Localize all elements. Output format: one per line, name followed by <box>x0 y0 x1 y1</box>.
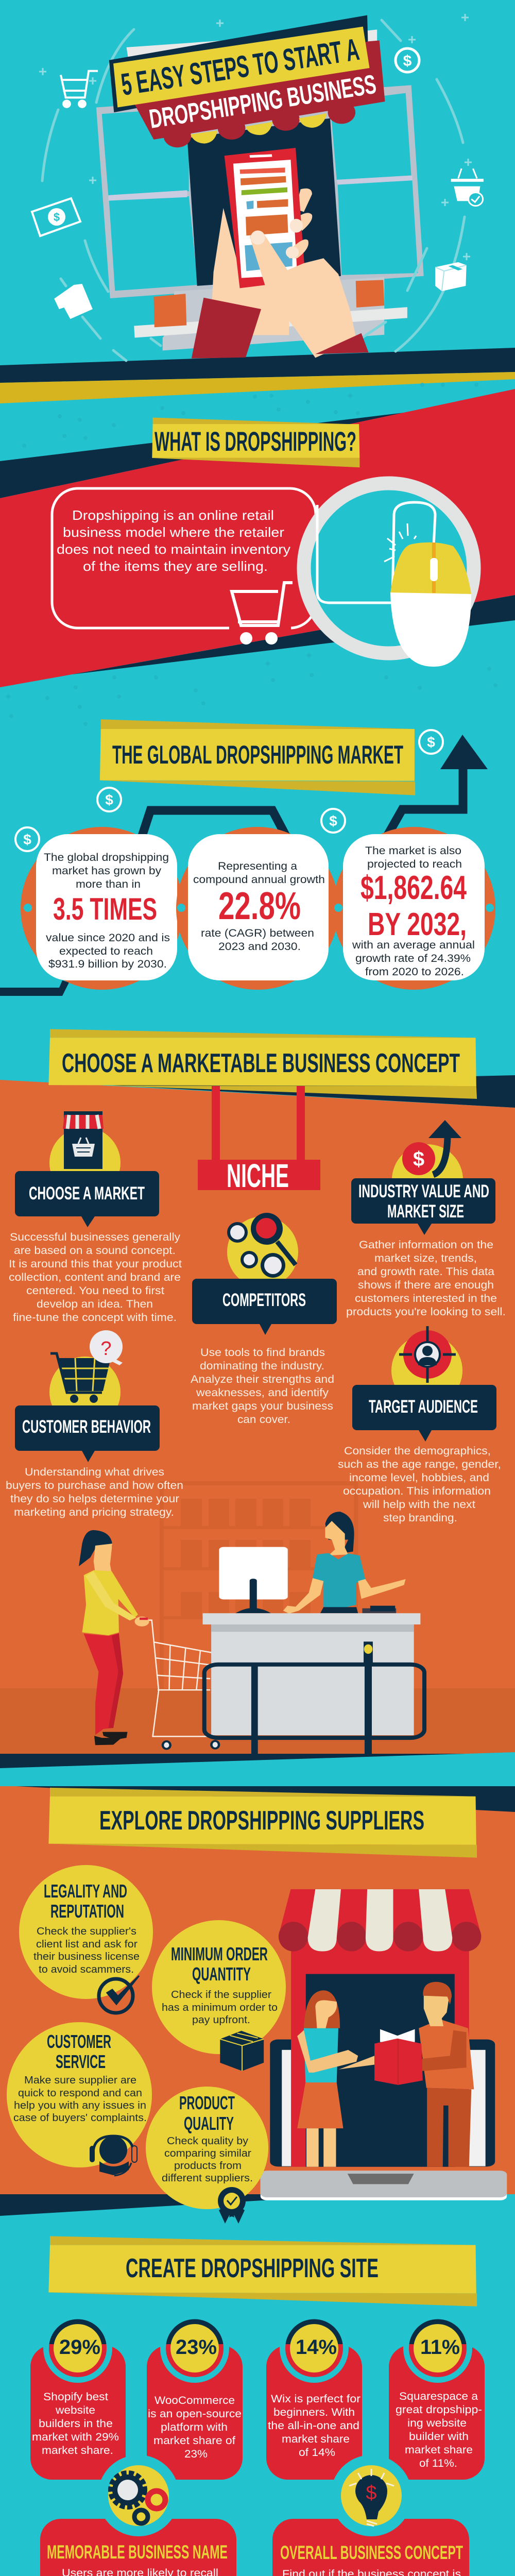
stat card: WooCommerce 23 percent: market share of <box>153 2435 235 2447</box>
section heading: explore suppliers <box>48 1788 477 1858</box>
icon: competitors magnifier and people <box>227 1213 298 1287</box>
text: customer behavior description: buyers to purchase and how often <box>6 1480 183 1492</box>
stat card: WooCommerce 23 percent: platform with <box>161 2421 228 2433</box>
panel: minimum order quantity: has a minimum order to <box>162 2002 278 2013</box>
panel: laptop base <box>261 2171 507 2200</box>
stat card: Squarespace 11 percent: builder with <box>409 2431 469 2443</box>
panel: customer service: quick to respond and can <box>18 2088 142 2099</box>
text: industry value description <box>346 1239 506 1318</box>
panel: market stat 22.8 percent <box>176 827 339 990</box>
icon: dollar coin: $ <box>403 53 412 70</box>
hero: smartphone held in hand <box>192 148 369 359</box>
callout: choose a market: CHOOSE A MARKET <box>29 1183 145 1204</box>
panel: minimum order quantity: MINIMUM ORDER <box>171 1943 268 1964</box>
icon: support headset <box>90 2136 137 2176</box>
icon: dollar coins: $ <box>105 792 113 808</box>
stat card: Wix 14 percent: 14% <box>296 2336 337 2359</box>
callout: competitors <box>192 1279 337 1335</box>
callout: customer behavior <box>15 1405 160 1462</box>
callout: customer behavior: CUSTOMER BEHAVIOR <box>22 1417 151 1437</box>
panel: market stat 3.5 times: value since 2020 and is <box>46 932 170 944</box>
illustration: cashier at monitor <box>219 1512 406 1614</box>
callout: target audience <box>352 1385 496 1442</box>
icon: light bulb with dollar <box>331 2455 412 2536</box>
icon: computer mouse in circle <box>304 483 474 667</box>
text: choose a market description <box>9 1231 182 1324</box>
panel: market stat 1862.64: $1,862.64 <box>360 869 467 906</box>
section heading: what is dropshipping: WHAT IS DROPSHIPPING? <box>154 427 356 457</box>
panel: market stat 1862.64: with an average annual <box>352 939 475 951</box>
text: target audience description: step branding. <box>383 1512 457 1524</box>
stat card: Squarespace 11 percent <box>389 2314 485 2480</box>
text: choose a market description: fine-tune the concept with time. <box>13 1312 177 1324</box>
panel: market stat 3.5 times: The global dropshipping <box>44 852 169 863</box>
icon: gears <box>98 2455 179 2536</box>
hero: storefront window <box>96 85 424 350</box>
stat card: Squarespace 11 percent: of 11%. <box>419 2458 457 2469</box>
panel: market stat 1862.64: projected to reach <box>367 858 462 870</box>
callout: industry value and market size: MARKET SIZE <box>387 1201 464 1222</box>
panel: product quality <box>146 2087 268 2209</box>
panel: minimum order quantity: Check if the supplier <box>171 1989 271 2001</box>
panel: product quality: Check quality by <box>167 2136 248 2147</box>
icon: basket <box>451 168 484 206</box>
panel: legality and reputation: client list and ask for <box>36 1939 138 1950</box>
callout: industry value and market size <box>351 1178 495 1235</box>
panel: market stat 3.5 times: expected to reach <box>59 945 153 957</box>
icon: dollar coins: $ <box>329 813 337 829</box>
stat card: Squarespace 11 percent: ing website <box>407 2417 467 2429</box>
hero: awning with title <box>109 15 385 147</box>
panel: legality and reputation: their business license <box>33 1951 140 1962</box>
stat card: Squarespace 11 percent: great dropshipp- <box>396 2404 482 2416</box>
stat card: Squarespace 11 percent: market share <box>405 2444 473 2456</box>
panel: customer service: help you with any issues in <box>14 2100 146 2111</box>
hero: awning with title: DROPSHIPPING BUSINESS <box>147 70 378 134</box>
icon: cart on definition panel <box>229 583 293 645</box>
panel: market stat 1862.64: from 2020 to 2026. <box>365 966 464 978</box>
stat card: Wix 14 percent: beginners. With <box>273 2406 355 2418</box>
panel: legality and reputation: Check the supplier's <box>37 1926 136 1937</box>
panel: product quality: comparing similar <box>164 2148 251 2159</box>
growth arrow <box>0 735 488 996</box>
icon: parcel box <box>435 262 467 291</box>
panel: minimum order quantity <box>152 1920 286 2054</box>
callout: competitors: COMPETITORS <box>222 1290 306 1310</box>
text: target audience description: Consider the demographics, <box>344 1445 491 1457</box>
text: choose a market description: develop an idea. Then <box>37 1298 153 1310</box>
niche hanging sign <box>198 1086 320 1194</box>
panel: market stat 1862.64: growth rate of 24.39% <box>355 953 471 964</box>
panel: product quality: PRODUCT <box>179 2092 235 2113</box>
text: competitors description: can cover. <box>237 1414 290 1426</box>
stat card: Wix 14 percent: the all-in-one and <box>268 2420 359 2432</box>
panel: market stat 3.5 times: more than in <box>76 878 141 890</box>
section heading: global market <box>100 719 415 795</box>
stat card: Squarespace 11 percent: Squarespace a <box>399 2391 478 2402</box>
text: industry value description: and growth rate. This data <box>357 1266 494 1278</box>
text: choose a market description: collection, content and brand are <box>9 1272 181 1283</box>
panel: legality and reputation: LEGALITY AND <box>44 1880 127 1902</box>
stat card: Wix 14 percent: of 14% <box>299 2447 335 2459</box>
panel: legality and reputation <box>19 1865 153 1999</box>
panel: legality and reputation: to avoid scammers. <box>39 1964 134 1975</box>
text: target audience description <box>338 1445 501 1524</box>
icon: customer behaviour cart: ? <box>100 1338 112 1360</box>
icon: industry value dollar and arrow: $ <box>413 1148 424 1171</box>
icon: cardboard box <box>220 2031 264 2071</box>
text: competitors description: market gaps your business <box>192 1400 333 1412</box>
stat card: Shopify 29 percent <box>30 2314 126 2480</box>
text: choose a market description: centered. You need to first <box>26 1285 164 1297</box>
illustration: checkout counter <box>203 1613 424 1755</box>
panel: customer service <box>7 2022 152 2167</box>
panel: dropshipping definition: Dropshipping is an online retail <box>72 507 274 523</box>
text: competitors description: Use tools to find brands <box>200 1347 325 1359</box>
panel: market stat 3.5 times: 3.5 TIMES <box>53 892 157 926</box>
panel: customer service: CUSTOMER <box>47 2031 111 2052</box>
stat card: Shopify 29 percent: builders in the <box>39 2418 113 2430</box>
text: choose a market description: Successful businesses generally <box>10 1231 181 1243</box>
panel: market stat 22.8 percent: rate (CAGR) between <box>201 927 314 939</box>
panel: product quality: products from <box>174 2160 242 2172</box>
panel: overall business concept <box>272 2519 469 2576</box>
icon: industry value dollar and arrow <box>392 1120 463 1215</box>
illustration: customer pushing cart <box>79 1530 220 1750</box>
section heading: what is dropshipping <box>152 417 359 467</box>
icon: storefront with basket <box>49 1111 121 1198</box>
text: target audience description: will help with the next <box>363 1499 475 1511</box>
icon: customer behaviour cart <box>49 1330 123 1428</box>
callout: choose a market <box>15 1171 159 1227</box>
text: competitors description: Analyze their strengths and <box>191 1374 334 1385</box>
panel: market stat 1862.64 <box>333 827 495 990</box>
decorative arc around hero <box>42 20 465 361</box>
text: target audience description: occupation. This information <box>343 1485 491 1497</box>
text: customer behavior description: marketing and pricing strategy. <box>14 1506 174 1518</box>
illustration: shop shelves <box>160 1481 358 1688</box>
stat card: Wix 14 percent: market share <box>282 2433 350 2445</box>
text: customer behavior description <box>6 1466 183 1518</box>
panel: legality and reputation: REPUTATION <box>50 1901 124 1922</box>
stat card: Shopify 29 percent: market with 29% <box>32 2431 119 2443</box>
panel: memorable business name: MEMORABLE BUSINESS NAME <box>47 2541 228 2563</box>
icon: shopping cart <box>61 71 98 107</box>
panel: market stat 1862.64: The market is also <box>365 845 461 857</box>
text: target audience description: such as the age range, gender, <box>338 1459 501 1470</box>
icon: banknote <box>32 198 80 236</box>
panel: market stat 1862.64: BY 2032, <box>368 907 467 942</box>
stat card: WooCommerce 23 percent: 23% <box>176 2336 217 2359</box>
stat card: Wix 14 percent: Wix is perfect for <box>271 2393 360 2405</box>
panel: dropshipping definition: of the items they are selling. <box>83 558 268 574</box>
hero: small plus signs <box>39 14 472 260</box>
section heading: create site: CREATE DROPSHIPPING SITE <box>126 2253 379 2283</box>
panel: market stat 3.5 times: market has grown by <box>52 865 162 877</box>
text: industry value description: products you're looking to sell. <box>346 1306 506 1318</box>
panel: dropshipping definition: does not need to maintain inventory <box>57 541 290 557</box>
stat card: Shopify 29 percent: Shopify best <box>43 2391 108 2403</box>
icon: banknote: $ <box>54 211 60 224</box>
text: choose a market description: are based on a sound concept. <box>14 1245 176 1257</box>
panel: dropshipping definition <box>52 488 316 628</box>
text: industry value description: shows if there are enough <box>358 1279 494 1291</box>
icon: target audience <box>391 1326 462 1406</box>
stat card: WooCommerce 23 percent: is an open-source <box>148 2408 242 2420</box>
text: competitors description: weaknesses, and identify <box>196 1387 329 1399</box>
panel: dropshipping definition: business model where the retailer <box>63 524 284 540</box>
icon: t-shirt <box>54 284 93 319</box>
stat card: Shopify 29 percent: 29% <box>59 2336 100 2359</box>
panel: laptop storefront with handover <box>270 1889 495 2167</box>
niche hanging sign: NICHE <box>227 1157 289 1194</box>
icon: light bulb with dollar: $ <box>366 2482 377 2504</box>
panel: minimum order quantity: pay upfront. <box>192 2014 250 2026</box>
stat card: WooCommerce 23 percent: WooCommerce <box>154 2395 235 2406</box>
stat card: WooCommerce 23 percent <box>147 2314 243 2480</box>
panel: memorable business name <box>40 2519 236 2576</box>
text: choose a market description: It is around this that your product <box>9 1258 182 1270</box>
text: customer behavior description: they do so helps determine your <box>10 1493 179 1505</box>
icon: dollar coin <box>396 48 419 72</box>
text: industry value description: customers interested in the <box>355 1293 497 1304</box>
icon: dollar coins: $ <box>23 832 31 848</box>
icon: quality badge <box>218 2187 246 2224</box>
panel: market stat 22.8 percent: Representing a <box>218 860 297 872</box>
section heading: business concept <box>48 1029 477 1099</box>
stat card: Shopify 29 percent: market share. <box>42 2445 113 2456</box>
text: competitors description: dominating the industry. <box>200 1360 324 1372</box>
text: customer behavior description: Understanding what drives <box>25 1466 164 1478</box>
text: competitors description <box>191 1347 334 1426</box>
panel: market stat 22.8 percent: 22.8% <box>218 884 301 927</box>
panel: product quality: different suppliers. <box>162 2173 253 2184</box>
text: target audience description: income level, hobbies, and <box>349 1472 489 1484</box>
panel: customer service: case of buyers' complaints. <box>13 2112 147 2124</box>
panel: market stat 22.8 percent: 2023 and 2030. <box>218 941 301 953</box>
stat card: Wix 14 percent <box>266 2314 362 2480</box>
text: industry value description: Gather information on the <box>359 1239 493 1251</box>
stat card: WooCommerce 23 percent: 23% <box>184 2448 208 2460</box>
panel: minimum order quantity: QUANTITY <box>192 1963 251 1985</box>
icon: check mark <box>99 1976 139 2013</box>
stat card: Shopify 29 percent: website <box>55 2404 95 2416</box>
icon: dollar coins: $ <box>427 734 435 750</box>
panel: market stat 3.5 times: $931.9 billion by 2030. <box>48 958 167 970</box>
panel: customer service: SERVICE <box>56 2051 106 2072</box>
panel: market stat 3.5 times <box>21 827 183 990</box>
text: industry value description: market size, trends, <box>374 1252 477 1264</box>
panel: customer service: Make sure supplier are <box>24 2075 136 2086</box>
panel: product quality: QUALITY <box>184 2113 234 2134</box>
panel: market stat 22.8 percent: compound annual growth <box>193 874 325 886</box>
section heading: create site <box>48 2236 477 2307</box>
stat card: Squarespace 11 percent: 11% <box>420 2336 460 2359</box>
icon: dollar coins <box>15 730 443 851</box>
